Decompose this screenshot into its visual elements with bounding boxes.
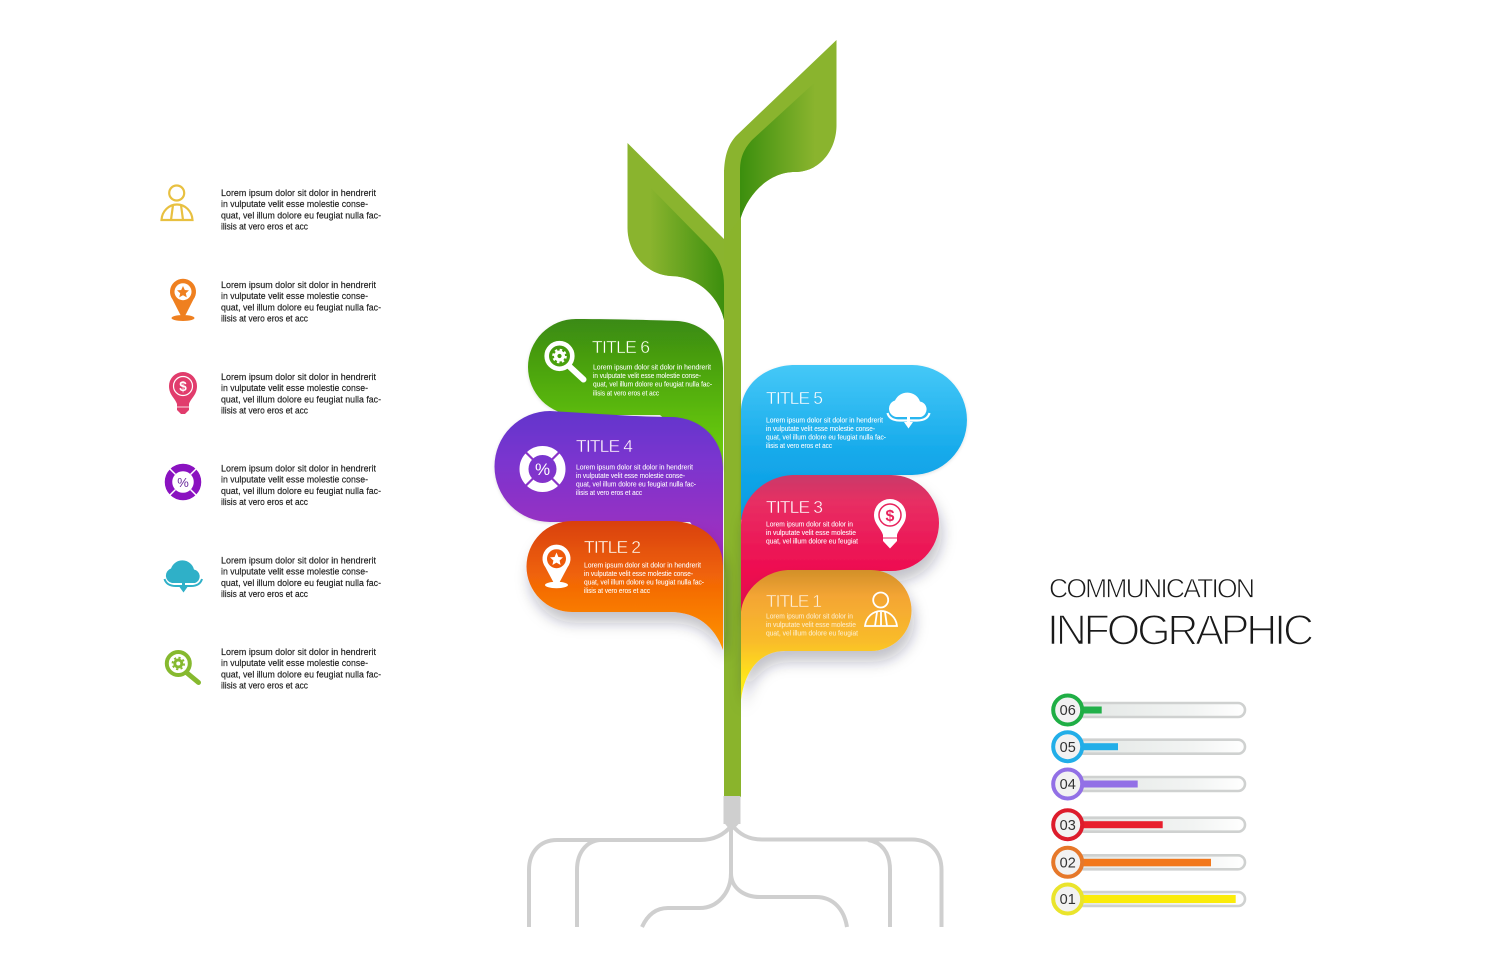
text block (576, 462, 696, 497)
text block (593, 362, 712, 398)
text block (221, 188, 381, 232)
panel: title 6 (528, 319, 723, 470)
heading: TITLE 4 (576, 436, 633, 456)
text block: Lorem ipsum dolor sit dolor in hendrerit (221, 464, 376, 474)
text block: quat, vel illum dolore eu feugiat nulla fac- (221, 578, 381, 589)
icon: magnifier with gear (547, 343, 584, 380)
bar 06: 06 (1060, 703, 1076, 719)
bar 03 (1053, 810, 1245, 839)
bar 02: 02 (1060, 856, 1076, 872)
heading: TITLE 5 (766, 388, 823, 408)
text block: in vulputate velit esse molestie (766, 620, 856, 629)
text block: quat, vel illum dolore eu feugiat nulla fac- (221, 210, 381, 222)
left legend item 2 (170, 279, 381, 324)
text block: Lorem ipsum dolor sit dolor in hendrerit (576, 462, 693, 472)
icon: percent donut: % (535, 460, 550, 479)
left legend item 1 (162, 186, 381, 232)
text block: Lorem ipsum dolor sit dolor in hendrerit (584, 560, 701, 570)
icon: dollar light bulb (874, 499, 906, 548)
text block: in vulputate velit esse molestie conse- (221, 474, 368, 486)
heading: TITLE 6 (592, 337, 650, 357)
icon: teal cloud (164, 560, 202, 592)
panel: title 5 (741, 365, 967, 520)
text block: in vulputate velit esse molestie conse- (221, 566, 368, 578)
text block: ilisis at vero eros et acc (221, 589, 308, 600)
icon: orange pin (170, 279, 196, 321)
bar 05: 05 (1060, 740, 1076, 756)
icon: purple percent donut (168, 468, 198, 496)
bar 01: 01 (1060, 892, 1076, 908)
left legend item 6 (167, 647, 381, 692)
plant stem (724, 170, 741, 797)
icon: pink bulb (169, 372, 197, 414)
panel: title 2 (527, 521, 723, 650)
right leaf (724, 40, 836, 218)
text block: ilisis at vero eros et acc (576, 488, 642, 497)
text block: quat, vel illum dolore eu feugiat nulla fac- (576, 480, 696, 488)
text block: in vulputate velit esse molestie (766, 528, 856, 537)
panel: title 3 (741, 475, 939, 612)
text block: quat, vel illum dolore eu feugiat nulla fac- (221, 486, 381, 497)
text block: Lorem ipsum dolor sit dolor in hendrerit (221, 188, 376, 199)
text block: quat, vel illum dolore eu feugiat (766, 536, 858, 546)
title (1047, 574, 1314, 654)
heading: TITLE 1 (766, 591, 822, 611)
text block: quat, vel illum dolore eu feugiat (766, 628, 858, 638)
text block: in vulputate velit esse molestie conse- (593, 371, 701, 380)
infographic canvas (160, 40, 1312, 928)
text block (766, 520, 858, 546)
text block (584, 560, 704, 595)
bar 06 (1053, 696, 1245, 724)
roots (529, 796, 942, 927)
text block (221, 280, 381, 324)
text block: quat, vel illum dolore eu feugiat nulla fac- (584, 578, 704, 586)
text block (221, 372, 381, 416)
icon: green magnifier (167, 652, 198, 682)
text block (766, 416, 886, 450)
text block: Lorem ipsum dolor sit dolor in hendrerit (221, 280, 376, 291)
text block: ilisis at vero eros et acc (593, 388, 659, 398)
text block: quat, vel illum dolore eu feugiat nulla fac- (766, 432, 886, 442)
text block: in vulputate velit esse molestie conse- (221, 199, 368, 210)
text block: ilisis at vero eros et acc (221, 497, 308, 508)
bar 01 (1053, 884, 1245, 914)
text block: quat, vel illum dolore eu feugiat nulla fac- (593, 380, 712, 388)
text block: in vulputate velit esse molestie conse- (221, 291, 368, 302)
text block (221, 464, 381, 508)
text block (221, 647, 381, 692)
progress bar chart (1053, 696, 1245, 914)
text block: ilisis at vero eros et acc (584, 586, 650, 595)
bar 04 (1053, 770, 1245, 798)
icon: dollar light bulb: $ (886, 508, 895, 525)
title: COMMUNICATION (1049, 574, 1255, 604)
text block: in vulputate velit esse molestie conse- (584, 569, 693, 578)
icon: percent donut (524, 450, 561, 488)
icon: person outline (162, 186, 192, 220)
left legend item 5 (164, 556, 381, 600)
text block: Lorem ipsum dolor sit dolor in (766, 520, 853, 528)
panel: title 1 (741, 570, 912, 700)
title: INFOGRAPHIC (1047, 606, 1314, 654)
icon: person (865, 592, 897, 626)
bar 04: 04 (1060, 777, 1076, 793)
left legend item 3 (169, 372, 381, 416)
text block: Lorem ipsum dolor sit dolor in hendrerit (766, 416, 883, 424)
bar 03: 03 (1060, 818, 1076, 834)
text block: in vulputate velit esse molestie conse- (576, 471, 685, 480)
text block: Lorem ipsum dolor sit dolor in hendrerit (221, 556, 376, 566)
text block: quat, vel illum dolore eu feugiat nulla fac- (221, 302, 381, 314)
panel: title 4 (495, 411, 723, 570)
heading: TITLE 2 (584, 537, 641, 557)
text block: Lorem ipsum dolor sit dolor in hendrerit (221, 647, 376, 658)
text block (221, 556, 381, 600)
icon: location pin (542, 545, 570, 588)
text block: ilisis at vero eros et acc (766, 441, 832, 450)
text block: quat, vel illum dolore eu feugiat nulla fac- (221, 670, 381, 680)
text block: ilisis at vero eros et acc (221, 680, 308, 692)
icon: purple percent donut: % (177, 475, 189, 490)
text block: in vulputate velit esse molestie conse- (221, 658, 368, 669)
bar 05 (1053, 732, 1245, 761)
left legend item 4 (168, 464, 381, 508)
text block: in vulputate velit esse molestie conse- (221, 383, 368, 394)
bar 02 (1053, 848, 1245, 877)
text block: in vulputate velit esse molestie conse- (766, 424, 875, 433)
heading: TITLE 3 (766, 497, 823, 517)
text block: ilisis at vero eros et acc (221, 406, 308, 416)
text block: ilisis at vero eros et acc (221, 314, 308, 324)
left leaf (628, 143, 724, 325)
text block: Lorem ipsum dolor sit dolor in hendrerit (593, 362, 711, 372)
icon: cloud (888, 393, 930, 428)
text block: ilisis at vero eros et acc (221, 222, 308, 232)
icon: pink bulb: $ (179, 379, 187, 394)
text block: Lorem ipsum dolor sit dolor in (766, 612, 853, 620)
text block: quat, vel illum dolore eu feugiat nulla fac- (221, 394, 381, 406)
text block (766, 612, 858, 638)
text block: Lorem ipsum dolor sit dolor in hendrerit (221, 372, 376, 383)
